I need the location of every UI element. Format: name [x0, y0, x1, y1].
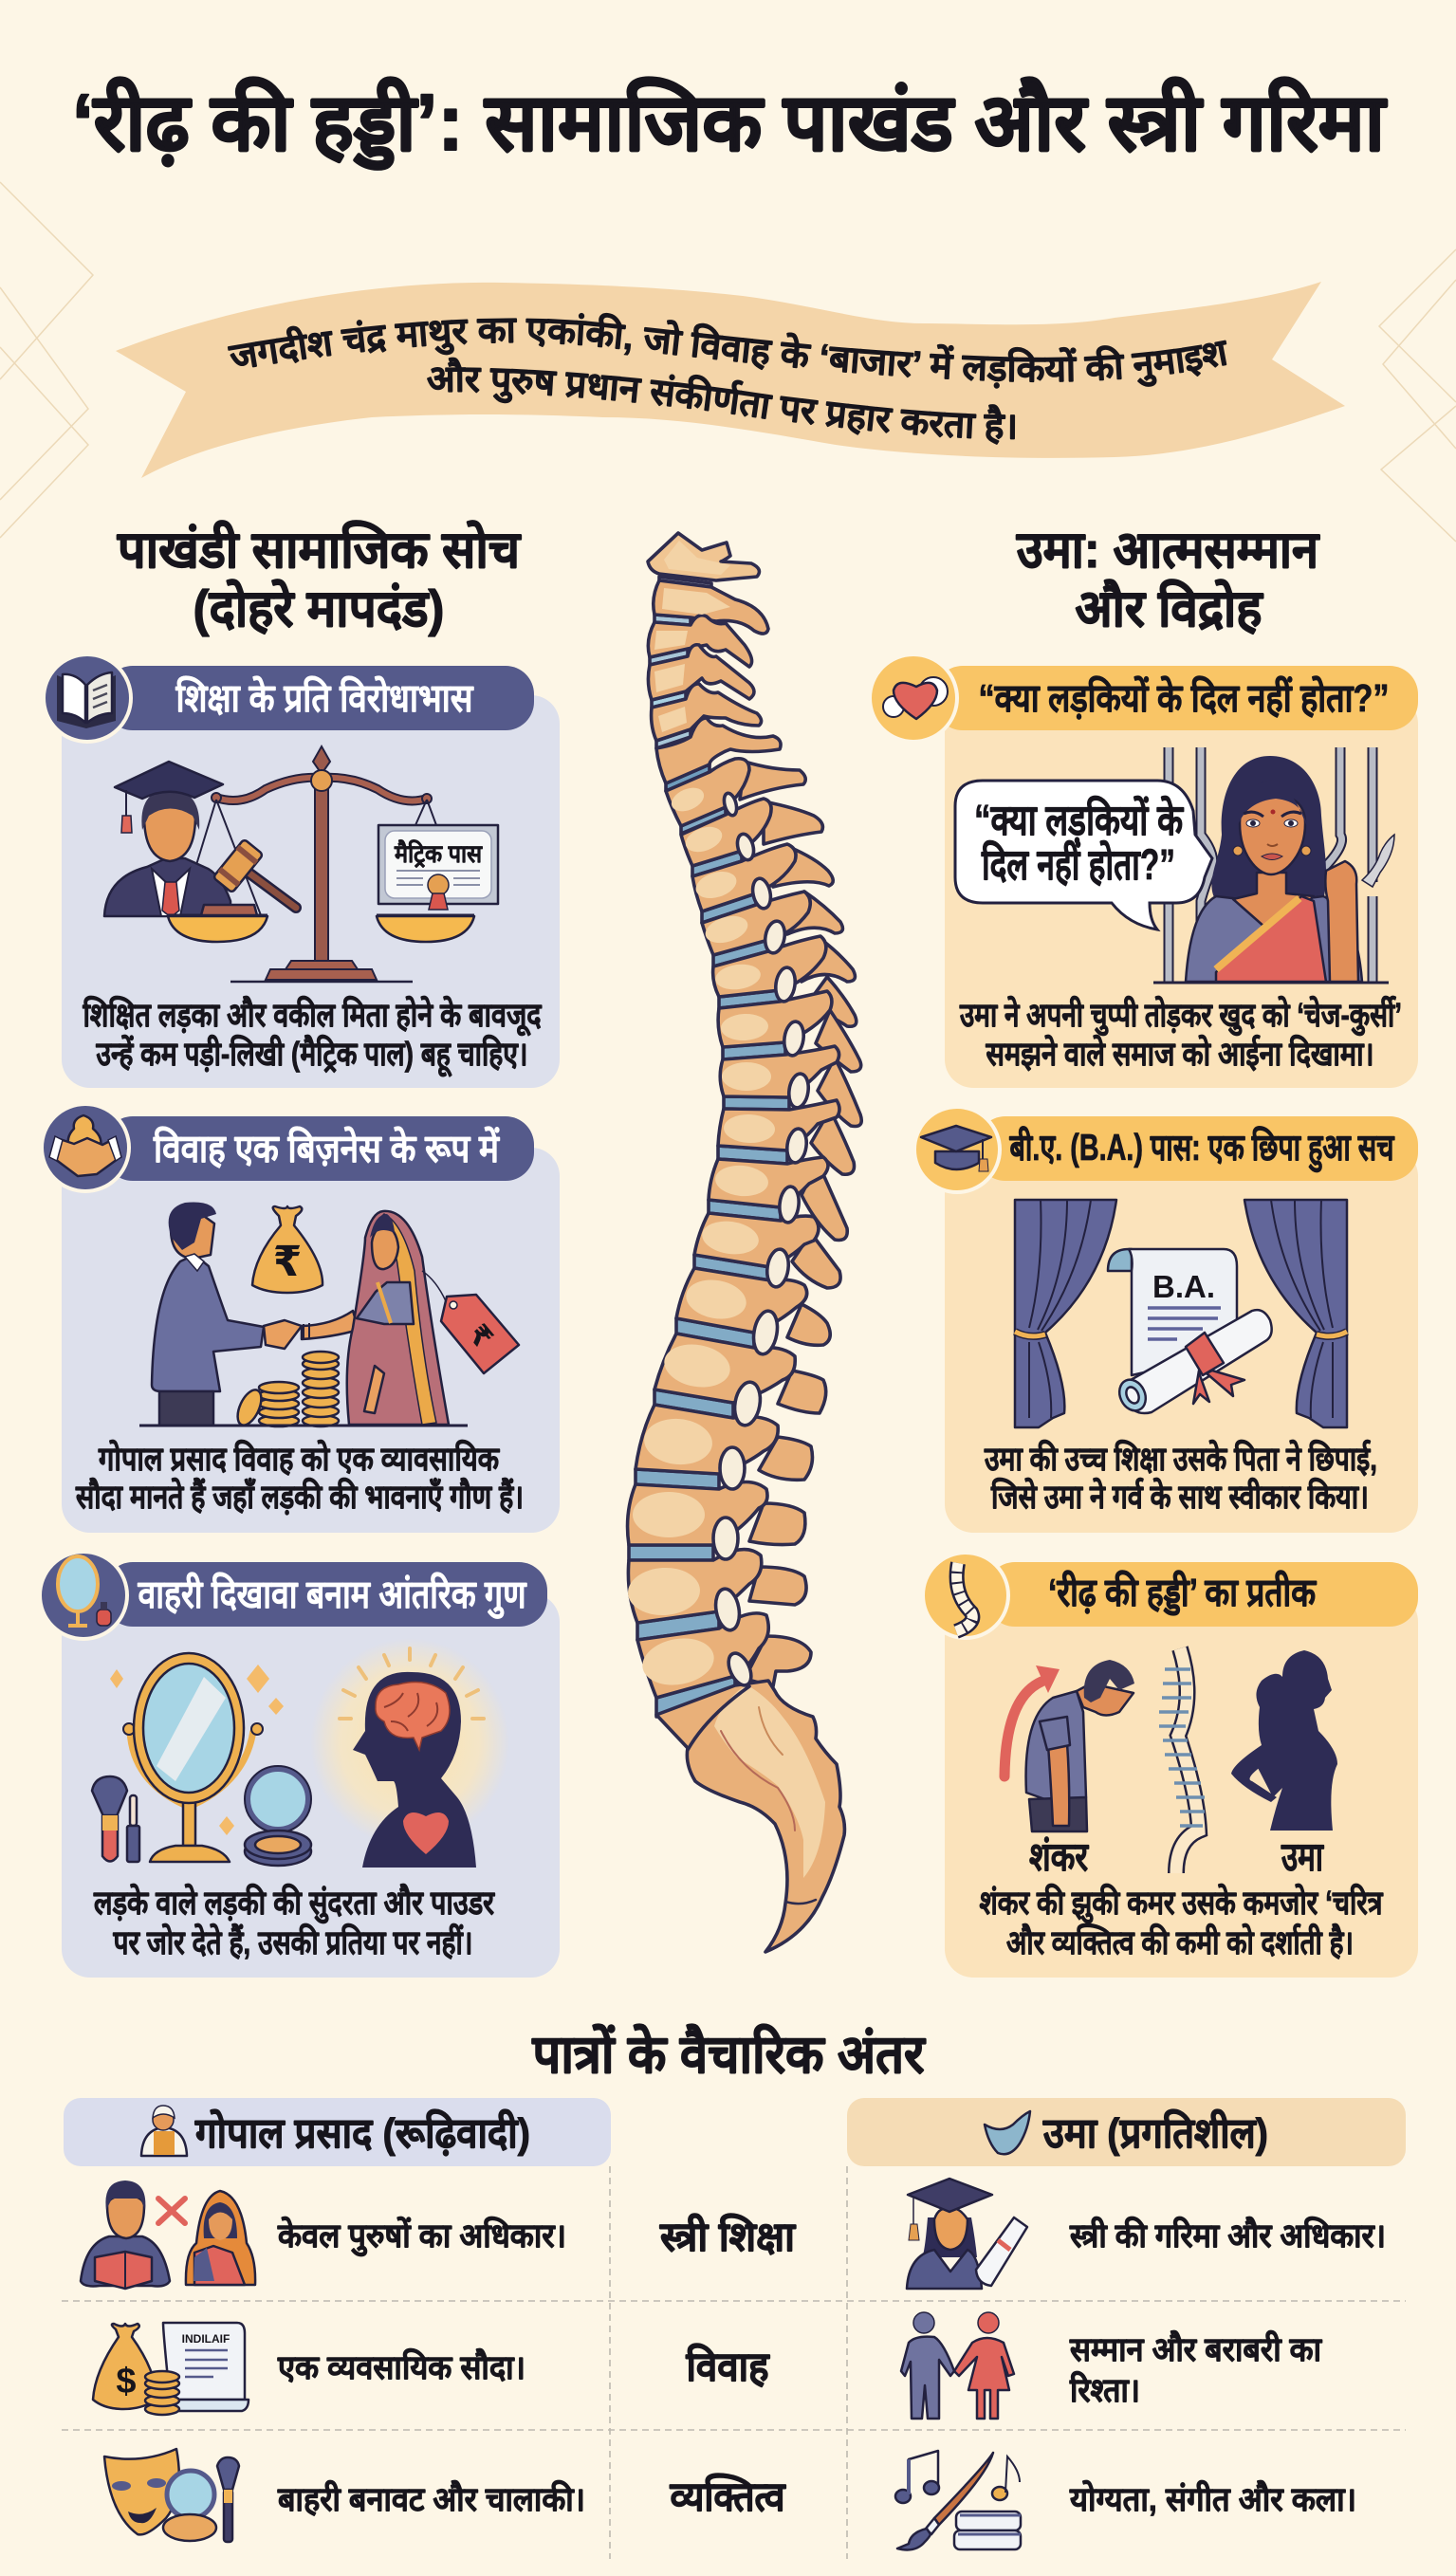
icon: small spine	[923, 1553, 1008, 1638]
heading: left column	[117, 520, 522, 637]
illustration: handshake deal with bride and price tag: ₹	[273, 1238, 302, 1286]
panel: education contradiction	[44, 654, 560, 1088]
illustration: Shankar, spine and Uma	[1004, 1648, 1337, 1879]
description text: पर जोर देते हैं, उसकी प्रतिया पर नहीं।	[113, 1923, 472, 1961]
row: marriage: एक व्यवसायिक सौदा।	[277, 2348, 525, 2386]
heading: left column: पाखंडी सामाजिक सोच	[117, 520, 522, 579]
header pill	[986, 1562, 1418, 1627]
description text: उमा की उच्च शिक्षा उसके पिता ने छिपाई,	[984, 1440, 1377, 1478]
icon: mirror and perfume	[40, 1552, 127, 1639]
header pill	[104, 1116, 534, 1181]
banner ribbon with subtitle	[116, 282, 1345, 478]
panel: outer show vs inner qualities	[40, 1552, 560, 1978]
icon: man reading, woman excluded	[81, 2180, 255, 2289]
icon: heart with speech bubbles	[870, 654, 957, 742]
row: women's education: स्त्री शिक्षा	[659, 2213, 797, 2260]
panel: hidden B.A. degree	[914, 1107, 1418, 1533]
row: women's education	[81, 2179, 1386, 2289]
title: ‘रीढ़ की हड्डी’: सामाजिक पाखंड और स्त्री गरिमा	[72, 77, 1388, 170]
row: women's education: स्त्री की गरिमा और अधिकार।	[1069, 2217, 1386, 2254]
table header: Gopal Prasad: गोपाल प्रसाद (रूढ़िवादी)	[194, 2108, 530, 2157]
icon: money bag and contract: INDILAIF	[182, 2332, 230, 2346]
row: personality: बाहरी बनावट और चालाकी।	[277, 2480, 585, 2518]
icon: mask, compact and brush	[104, 2449, 239, 2542]
description text: गोपाल प्रसाद विवाह को एक व्यावसायिक	[98, 1440, 500, 1478]
row: marriage: सम्मान और बराबरी का	[1069, 2330, 1323, 2368]
icon: handshake with money bag	[42, 1104, 129, 1191]
header pill: ‘रीढ़ की हड्डी’ का प्रतीक	[1048, 1570, 1317, 1616]
heading: right column	[1016, 522, 1320, 637]
table header: Gopal Prasad	[64, 2098, 611, 2166]
panel: marriage as business	[42, 1104, 560, 1533]
description text	[93, 1884, 495, 1961]
illustration: Shankar, spine and Uma: उमा	[1281, 1834, 1325, 1879]
illustration: handshake deal with bride and price tag: ₹	[461, 1318, 499, 1354]
header pill: विवाह एक बिज़नेस के रूप में	[153, 1126, 500, 1170]
heading: right column: उमा: आत्मसम्मान	[1016, 522, 1320, 579]
row: women's education: केवल पुरुषों का अधिकार।	[277, 2217, 566, 2256]
illustration: curtains revealing B.A. degree: B.A.	[1152, 1269, 1215, 1304]
row: marriage: विवाह	[686, 2343, 771, 2390]
row: personality: व्यक्तित्व	[670, 2473, 786, 2520]
row: personality	[104, 2449, 1356, 2549]
illustration: handshake deal with bride and price tag	[139, 1203, 519, 1428]
header pill: “क्या लड़कियों के दिल नहीं होता?”	[979, 675, 1389, 720]
scales illustration: graduate, gavel and certificate	[104, 746, 498, 982]
description text	[979, 1884, 1384, 1961]
banner ribbon with subtitle: जगदीश चंद्र माथुर का एकांकी, जो विवाह के ‘बाजार’ में लड़कियों की नुमाइश	[228, 313, 1227, 389]
heading: comparison of characters: पात्रों के वैचारिक अंतर	[532, 2023, 926, 2084]
heading: left column: (दोहरे मापदंड)	[194, 579, 444, 637]
header pill: वाहरी दिखावा बनाम आंतरिक गुण	[138, 1572, 527, 1619]
description text: उन्हें कम पड़ी-लिखी (मैट्रिक पाल) बहू चाहिए।	[96, 1035, 528, 1077]
banner ribbon with subtitle: और पुरुष प्रधान संकीर्णता पर प्रहार करता है।	[427, 357, 1015, 445]
description text	[959, 996, 1402, 1073]
icon: couple holding hands	[901, 2312, 1014, 2419]
panel: symbol of the spine	[923, 1553, 1418, 1978]
illustration: curtains revealing B.A. degree	[1015, 1200, 1347, 1427]
icon: money bag and contract: $	[116, 2362, 137, 2401]
description text: लड़के वाले लड़की की सुंदरता और पाउडर	[93, 1884, 495, 1923]
illustration: Uma behind bars with speech bubble: “क्या लड़कियों के	[974, 795, 1184, 844]
icon: scarf	[985, 2111, 1030, 2154]
icon: music, paintbrush and books	[895, 2451, 1021, 2549]
illustration: mirror, cosmetics and silhouette with brain and heart	[92, 1638, 509, 1868]
illustration: Uma behind bars with speech bubble: दिल नहीं होता?”	[981, 839, 1175, 889]
illustration: Shankar, spine and Uma: शंकर	[1029, 1834, 1089, 1879]
icon: graduation cap	[914, 1107, 1000, 1192]
description text	[984, 1440, 1377, 1516]
description text: सौदा मानते हैं जहाँ लड़की की भावनाएँ गौण हैं।	[75, 1478, 524, 1516]
description text	[83, 996, 543, 1077]
description text: समझने वाले समाज को आईना दिखामा।	[986, 1035, 1373, 1073]
icon: elderly man	[141, 2106, 187, 2156]
heading: right column: और विद्रोह	[1076, 579, 1264, 637]
description text: और व्यक्तित्व की कमी को दर्शाती है।	[1006, 1923, 1354, 1961]
header pill: शिक्षा के प्रति विरोधाभास	[175, 675, 474, 720]
description text: जिसे उमा ने गर्व के साथ स्वीकार किया।	[990, 1478, 1369, 1516]
row: marriage	[93, 2312, 1323, 2419]
icon: money bag and contract	[93, 2323, 249, 2415]
scales illustration: graduate, gavel and certificate: मैट्रिक पास	[394, 839, 483, 868]
panel: Uma's question	[870, 654, 1418, 1088]
central spine illustration	[627, 533, 861, 1952]
icon: open book	[44, 654, 131, 742]
header pill	[104, 1562, 547, 1627]
header pill	[977, 1116, 1418, 1181]
header pill	[934, 666, 1418, 730]
table header: Uma	[847, 2098, 1406, 2166]
description text	[75, 1440, 524, 1516]
header pill	[104, 666, 534, 730]
description text: शिक्षित लड़का और वकील मिता होने के बावजूद	[83, 996, 543, 1037]
row: personality: योग्यता, संगीत और कला।	[1069, 2480, 1356, 2518]
illustration: Uma behind bars with speech bubble	[955, 747, 1394, 983]
icon: graduate woman with diploma	[907, 2179, 1027, 2289]
row: marriage: रिश्ता।	[1069, 2371, 1140, 2409]
table header: Uma: उमा (प्रगतिशील)	[1042, 2108, 1268, 2157]
